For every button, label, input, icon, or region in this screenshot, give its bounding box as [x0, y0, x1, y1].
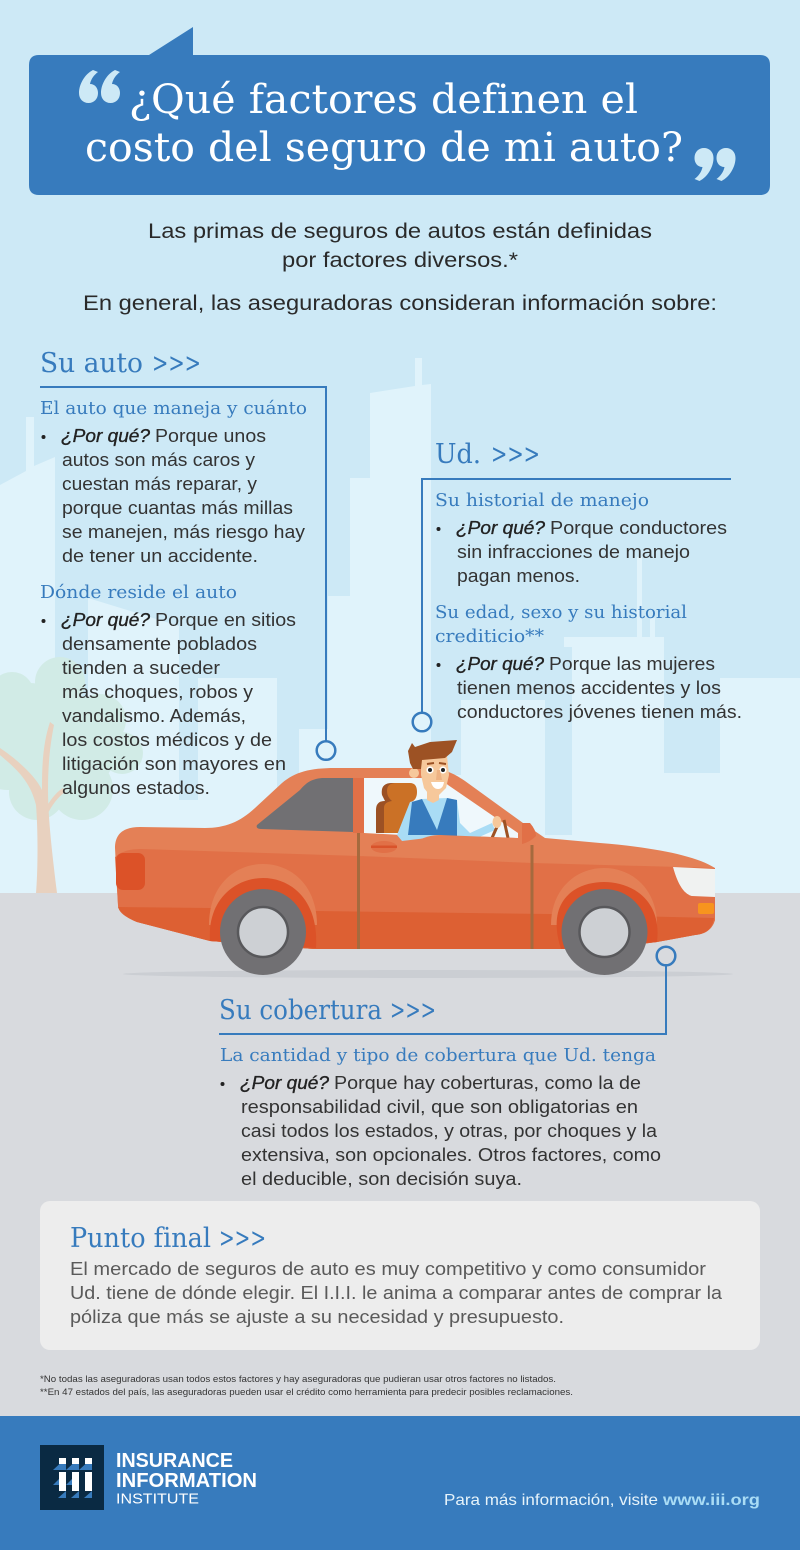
title text: costo del seguro de mi auto?	[85, 125, 683, 171]
text block: vandalismo. Además,	[62, 705, 246, 726]
side window	[364, 778, 518, 838]
text block: casi todos los estados, y otras, por choques y la	[241, 1120, 658, 1141]
section: Ud.	[413, 439, 742, 731]
footnotes: **En 47 estados del país, las aseguradoras pueden usar el crédito como herramienta para predecir posibles reclamaciones.	[40, 1387, 573, 1398]
neck	[427, 790, 439, 803]
intro text: por factores diversos.*	[282, 248, 519, 272]
heading	[40, 348, 201, 379]
text block: ¿Por qué?	[240, 1072, 330, 1093]
intro text	[83, 219, 717, 315]
text block	[70, 1258, 723, 1327]
text block: conductores jóvenes tienen más.	[457, 701, 742, 722]
rear window	[257, 778, 353, 832]
door lines	[358, 833, 532, 949]
headlight	[673, 867, 715, 897]
heading: >>>	[152, 348, 201, 379]
text block: póliza que más se ajuste a su necesidad y presupuesto.	[70, 1306, 564, 1327]
text block: ¿Por qué?	[61, 425, 151, 446]
text block: el deducible, son decisión suya.	[241, 1168, 522, 1189]
text block: Porque unos	[155, 425, 266, 446]
hair	[408, 740, 457, 769]
text block: Porque en sitios	[155, 609, 296, 630]
heading: Ud.	[435, 439, 481, 470]
panel: Punto final	[40, 1201, 760, 1350]
website note: Para más información, visite	[444, 1492, 658, 1509]
text block: pagan menos.	[457, 565, 580, 586]
text block: densamente poblados	[62, 633, 257, 654]
text block: cuestan más reparar, y	[62, 473, 258, 494]
subheading: El auto que maneja y cuánto	[40, 398, 307, 419]
car body	[115, 768, 715, 949]
section: Su auto	[40, 348, 335, 798]
ear	[409, 768, 419, 778]
eyebrows	[427, 763, 446, 764]
text block	[42, 609, 296, 798]
subheading: crediticio**	[435, 626, 544, 647]
text block: Porque conductores	[550, 517, 727, 538]
text block: Porque las mujeres	[549, 653, 715, 674]
tree	[0, 657, 143, 893]
vest	[408, 798, 457, 837]
footer band	[0, 1416, 800, 1550]
text block: Ud. tiene de dónde elegir. El I.I.I. le anima a comparar antes de comprar la	[70, 1282, 723, 1303]
logo wordmark: INFORMATION	[116, 1470, 257, 1492]
heading	[435, 439, 540, 470]
tail light	[116, 853, 145, 890]
closing quote mark	[694, 148, 736, 181]
text block: autos son más caros y	[62, 449, 256, 470]
subheading: Su historial de manejo	[435, 490, 649, 511]
face	[421, 756, 449, 797]
text block: se manejen, más riesgo hay	[62, 521, 306, 542]
opening quote mark	[79, 70, 120, 103]
text block: porque cuantas más millas	[62, 497, 293, 518]
logo wordmark	[116, 1450, 257, 1508]
shirt	[397, 798, 495, 841]
subheading	[435, 602, 687, 647]
heading: >>>	[219, 1223, 266, 1254]
intro text: Las primas de seguros de autos están definidas	[148, 219, 652, 243]
logo wordmark: INSTITUTE	[116, 1490, 199, 1508]
connector line	[219, 965, 666, 1034]
website note	[444, 1492, 760, 1509]
window pillar	[353, 778, 364, 833]
city skyline	[0, 358, 800, 893]
logo mark	[40, 1445, 104, 1510]
text block: responsabilidad civil, que son obligatorias en	[241, 1096, 638, 1117]
title speech bubble	[29, 27, 770, 195]
ground	[0, 893, 800, 1416]
steering wheel	[492, 820, 508, 838]
title text: ¿Qué factores definen el	[129, 77, 638, 123]
text block: tienen menos accidentes y los	[457, 677, 721, 698]
smile	[431, 782, 444, 789]
hand	[492, 816, 502, 828]
text block: tienden a suceder	[62, 657, 220, 678]
text block: más choques, robos y	[62, 681, 254, 702]
heading: >>>	[390, 995, 436, 1026]
connector dot	[657, 947, 675, 965]
text block: Porque hay coberturas, como la de	[334, 1072, 641, 1093]
car	[115, 740, 715, 975]
text block: sin infracciones de manejo	[457, 541, 690, 562]
text block	[220, 1072, 661, 1189]
text block: ¿Por qué?	[456, 653, 545, 674]
subheading: La cantidad y tipo de cobertura que Ud. tenga	[220, 1045, 656, 1066]
section: Su cobertura	[219, 947, 675, 1189]
text block	[436, 653, 742, 722]
text block: algunos estados.	[62, 777, 210, 798]
connector dot	[317, 741, 335, 760]
heading: Su auto	[40, 348, 143, 379]
nose	[436, 770, 442, 780]
logo wordmark: INSURANCE	[116, 1450, 233, 1472]
text block: litigación son mayores en	[62, 753, 286, 774]
rear wheel	[209, 864, 317, 975]
intro text: En general, las aseguradoras consideran información sobre:	[83, 291, 717, 315]
subheading: Dónde reside el auto	[40, 582, 237, 603]
text block	[42, 425, 306, 566]
text block: ¿Por qué?	[456, 517, 546, 538]
front wheel	[551, 868, 658, 975]
title text	[85, 77, 683, 171]
subheading: Su edad, sexo y su historial	[435, 602, 687, 623]
heading: Su cobertura	[219, 995, 382, 1026]
indicator light	[698, 903, 714, 914]
connector dot	[413, 713, 431, 731]
shadow under car	[123, 970, 733, 978]
heading: Punto final	[70, 1223, 211, 1254]
website note: www.iii.org	[662, 1492, 760, 1509]
seat	[376, 783, 417, 833]
text block: los costos médicos y de	[62, 729, 272, 750]
door handle	[371, 841, 397, 853]
eyes	[426, 766, 447, 774]
text block	[436, 517, 727, 586]
text block: extensiva, son opcionales. Otros factores, como	[241, 1144, 661, 1165]
text block: ¿Por qué?	[61, 609, 151, 630]
heading: >>>	[491, 439, 540, 470]
text block: de tener un accidente.	[62, 545, 258, 566]
connector line	[40, 387, 326, 741]
lower door edge over cabin	[415, 835, 520, 848]
driver	[397, 740, 508, 841]
text block: El mercado de seguros de auto es muy competitivo y como consumidor	[70, 1258, 706, 1279]
footnotes	[40, 1374, 573, 1398]
mirror	[522, 823, 536, 844]
footnotes: *No todas las aseguradoras usan todos estos factores y hay aseguradoras que pudieran usar otros factores no listados.	[40, 1374, 556, 1385]
connector line	[422, 479, 731, 712]
